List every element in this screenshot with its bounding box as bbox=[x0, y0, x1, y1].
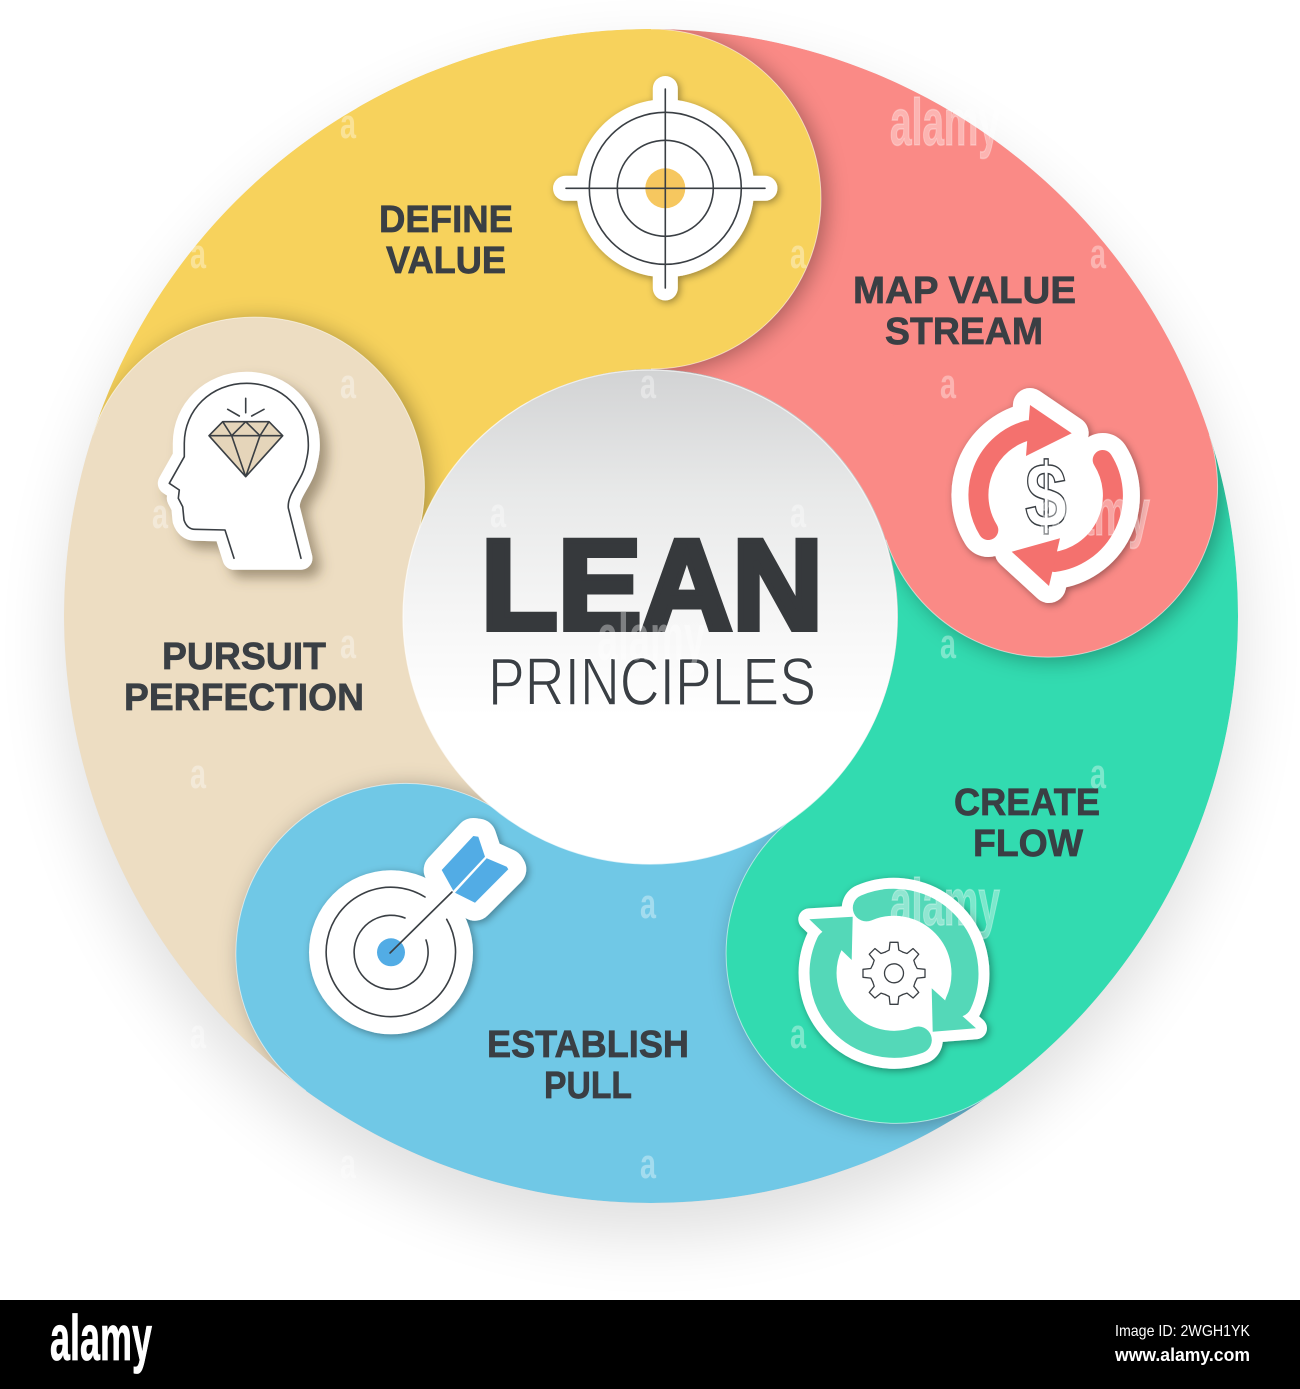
stock watermark: a bbox=[640, 1140, 656, 1187]
stock watermark: a bbox=[790, 1010, 806, 1057]
label: define value: DEFINE bbox=[379, 199, 513, 241]
icon: dollar cycle arrows: $ bbox=[1025, 445, 1067, 547]
segment: map value stream bbox=[651, 29, 1218, 657]
stock watermark: a bbox=[940, 620, 956, 667]
footer logo: alamy bbox=[50, 1302, 152, 1374]
label: pursuit perfection: PURSUIT bbox=[162, 636, 326, 678]
image id: Image ID: 2WGH1YK bbox=[1115, 1323, 1250, 1340]
label: create flow: FLOW bbox=[973, 823, 1083, 865]
label: map value stream: STREAM bbox=[885, 311, 1043, 353]
stock watermark: a bbox=[152, 490, 168, 537]
label: map value stream bbox=[853, 270, 1076, 353]
stock watermark: a bbox=[790, 230, 806, 277]
label: define value bbox=[379, 199, 513, 282]
stock watermark: alamy bbox=[890, 865, 1000, 939]
stock watermark: a bbox=[340, 1140, 356, 1187]
segment head: define value bbox=[358, 29, 839, 402]
stock watermark: a bbox=[340, 360, 356, 407]
label: create flow bbox=[954, 782, 1100, 865]
label: create flow: CREATE bbox=[954, 782, 1100, 824]
footer bar bbox=[0, 1300, 1300, 1389]
label: pursuit perfection bbox=[124, 636, 364, 719]
label: establish pull: ESTABLISH bbox=[487, 1024, 689, 1066]
label: establish pull bbox=[487, 1024, 689, 1107]
stock watermark: a bbox=[340, 100, 356, 147]
label: define value: VALUE bbox=[386, 240, 506, 282]
stock watermark: a bbox=[190, 1010, 206, 1057]
stock watermark: a bbox=[790, 489, 806, 536]
segment: pursuit perfection bbox=[64, 317, 506, 1091]
stock watermark: a bbox=[640, 880, 656, 927]
icon: gear cycle arrows bbox=[809, 902, 976, 1044]
icon: dollar cycle arrows bbox=[978, 405, 1113, 586]
label: pursuit perfection: PERFECTION bbox=[124, 677, 364, 719]
stock watermark bbox=[152, 85, 1150, 1187]
stock watermark: a bbox=[340, 620, 356, 667]
label: map value stream: MAP VALUE bbox=[853, 270, 1076, 312]
stock watermark: a bbox=[640, 360, 656, 407]
centre circle bbox=[403, 370, 897, 864]
stock watermark: a bbox=[940, 360, 956, 407]
stock watermark: alamy bbox=[597, 600, 705, 674]
stock watermark: a bbox=[1090, 230, 1106, 277]
subtitle: PRINCIPLES: PRINCIPLES bbox=[488, 644, 816, 720]
lean cycle ring bbox=[64, 29, 1262, 1203]
segment: create flow bbox=[726, 435, 1238, 1123]
icon: head with diamond bbox=[169, 383, 308, 558]
segment tail: define value bbox=[93, 29, 651, 540]
stock watermark: a bbox=[190, 750, 206, 797]
website: www.alamy.com bbox=[1114, 1345, 1250, 1365]
stock watermark: a bbox=[490, 489, 506, 536]
stock watermark: a bbox=[1090, 750, 1106, 797]
stock watermark: alamy bbox=[890, 85, 1000, 159]
stock watermark: a bbox=[190, 230, 206, 277]
label: establish pull: PULL bbox=[544, 1065, 632, 1107]
segment: establish pull bbox=[236, 783, 996, 1203]
title: LEAN: LEAN bbox=[481, 514, 823, 657]
ring drop shadow bbox=[61, 56, 1241, 1236]
icon: crosshair target bbox=[566, 88, 765, 288]
icon: bullseye with arrow bbox=[309, 836, 508, 1034]
stock watermark: alamy bbox=[1040, 475, 1150, 549]
